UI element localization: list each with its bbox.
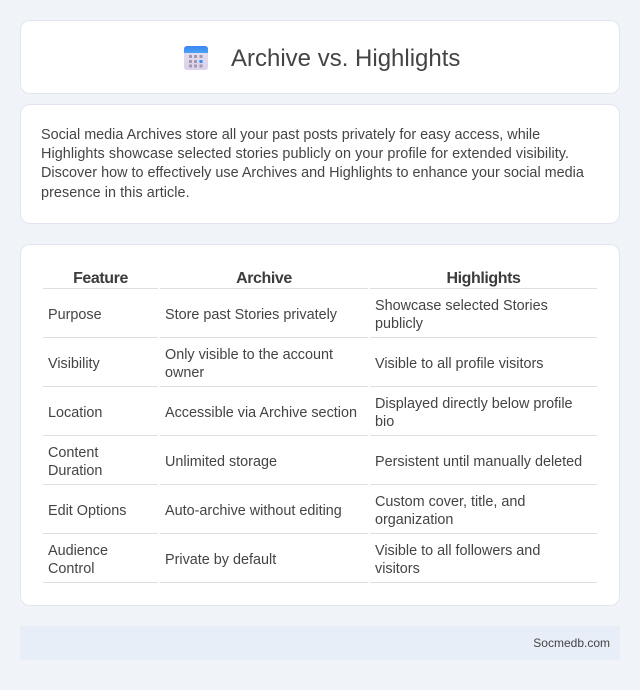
- row: visibility: [48, 347, 544, 381]
- comparison table panel: [20, 244, 620, 606]
- row: content duration: [48, 445, 582, 479]
- row: visibility: Visible to all profile visitors: [375, 356, 544, 372]
- row: audience control: Visible to all followers and: [375, 543, 540, 559]
- intro paragraph: presence in this article.: [41, 185, 190, 201]
- row: location: Location: [48, 405, 102, 421]
- column headers: [73, 270, 520, 287]
- row: content duration: Unlimited storage: [165, 454, 277, 470]
- intro paragraph: Discover how to effectively use Archives and Highlights to enhance your social media: [41, 165, 584, 181]
- intro text panel: [20, 104, 620, 224]
- column headers: Archive: [236, 270, 292, 287]
- row: audience control: Private by default: [165, 552, 276, 568]
- row: visibility: owner: [165, 365, 204, 381]
- row: purpose: Store past Stories privately: [165, 307, 337, 323]
- intro paragraph: Highlights showcase selected stories publicly on your profile for extended visibility.: [41, 146, 569, 162]
- row: edit options: Custom cover, title, and: [375, 494, 525, 510]
- column headers: Highlights: [446, 270, 520, 287]
- row: content duration: Content: [48, 445, 98, 461]
- row: audience control: Audience: [48, 543, 108, 559]
- row: location: Accessible via Archive section: [165, 405, 357, 421]
- row: audience control: Control: [48, 561, 94, 577]
- row: content duration: Duration: [48, 463, 102, 479]
- row: edit options: Edit Options: [48, 503, 126, 519]
- row: location: Displayed directly below profile: [375, 396, 573, 412]
- row: purpose: [48, 298, 548, 332]
- footer brand: Socmedb.com: [533, 636, 610, 650]
- row: visibility: Only visible to the account: [165, 347, 333, 363]
- title: Archive vs. Highlights: [231, 45, 460, 72]
- footer bar: [20, 626, 620, 660]
- row: purpose: publicly: [375, 316, 423, 332]
- row: edit options: Auto-archive without editing: [165, 503, 342, 519]
- row: purpose: Purpose: [48, 307, 102, 323]
- row: content duration: Persistent until manually deleted: [375, 454, 582, 470]
- row: purpose: Showcase selected Stories: [375, 298, 548, 314]
- row: edit options: [48, 494, 525, 528]
- column headers: Feature: [73, 270, 128, 287]
- icon: calendar: [184, 46, 208, 70]
- row: edit options: organization: [375, 512, 453, 528]
- row: location: [48, 396, 573, 430]
- row: audience control: [48, 543, 540, 577]
- row: audience control: visitors: [375, 561, 420, 577]
- header card: [20, 20, 620, 94]
- row: visibility: Visibility: [48, 356, 100, 372]
- intro paragraph: Social media Archives store all your past posts privately for easy access, while: [41, 126, 540, 142]
- intro paragraph: [41, 126, 584, 201]
- row: location: bio: [375, 414, 394, 430]
